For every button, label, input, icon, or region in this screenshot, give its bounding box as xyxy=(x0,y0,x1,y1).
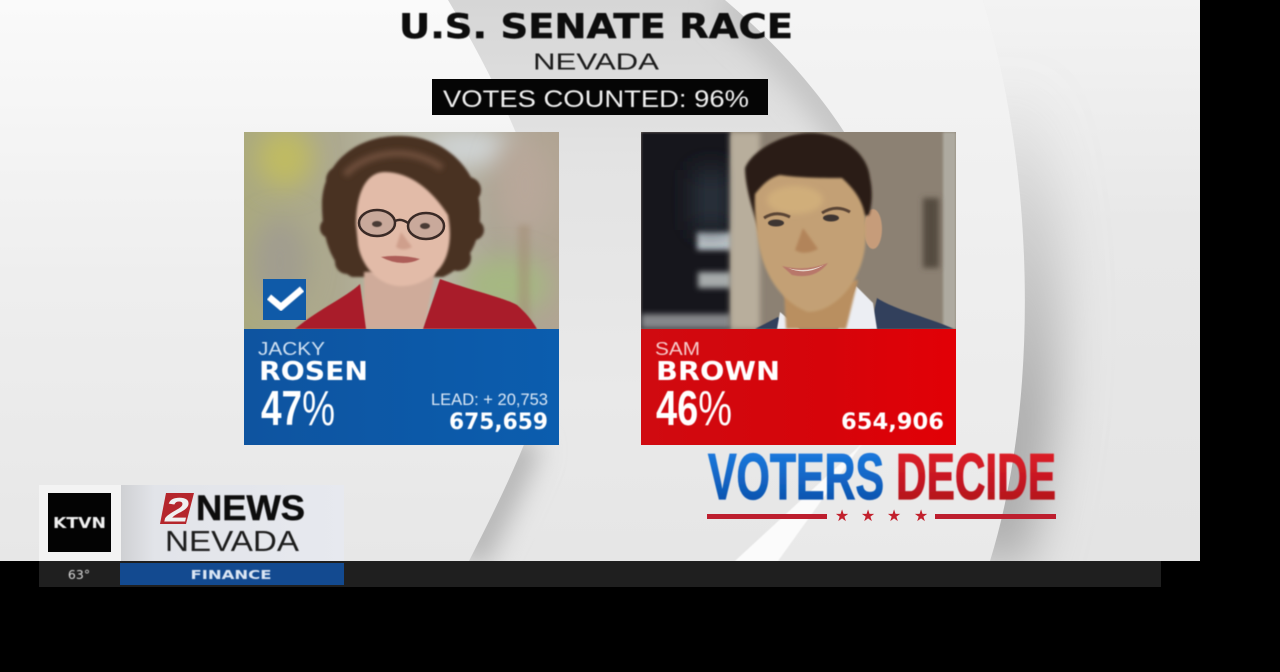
logo: 2 News Nevada: NEVADA xyxy=(165,526,300,558)
station bug: KTVN xyxy=(39,485,121,561)
hair xyxy=(320,136,484,277)
panel: Sam Brown xyxy=(641,132,956,445)
ticker bar xyxy=(39,561,1161,587)
background panel xyxy=(0,0,1200,561)
finance label: FINANCE xyxy=(190,567,272,582)
photo: Jacky Rosen xyxy=(244,128,559,330)
logo: Voters Decide: ★ xyxy=(914,508,928,525)
icon: checkmark xyxy=(263,279,306,320)
logo: Voters Decide: ★ xyxy=(887,508,901,525)
logo: 2 News Nevada: 2 xyxy=(164,492,189,530)
logo: Voters Decide xyxy=(707,440,1056,525)
name bar: Rosen: JACKY xyxy=(258,338,325,359)
title: U.S. SENATE RACE xyxy=(399,7,793,47)
logo: 2 News Nevada xyxy=(121,485,344,561)
neck xyxy=(784,280,858,329)
finance label xyxy=(120,563,344,585)
face xyxy=(356,172,450,286)
votes counted bar: VOTES COUNTED: 96% xyxy=(443,86,749,113)
ear xyxy=(864,209,882,249)
name bar: Rosen: LEAD: + 20,753 xyxy=(431,391,548,409)
glasses xyxy=(359,210,395,236)
jacket xyxy=(295,284,366,329)
name bar: Brown: SAM xyxy=(655,338,700,359)
logo: 2 News Nevada: NEWS xyxy=(196,489,305,528)
name bar: Brown xyxy=(641,329,956,445)
shirt xyxy=(777,286,877,329)
logo: Voters Decide: VOTERS xyxy=(708,440,884,513)
name bar: Rosen: 47% xyxy=(261,382,335,436)
logo: Voters Decide: DECIDE xyxy=(896,440,1056,513)
hair xyxy=(745,133,872,232)
name bar: Rosen: ROSEN xyxy=(259,357,368,387)
face xyxy=(755,175,866,312)
logo: Voters Decide: ★ xyxy=(861,508,875,525)
votes counted bar xyxy=(432,79,768,115)
neck xyxy=(364,268,436,329)
logo: Voters Decide: ★ xyxy=(835,508,849,525)
name bar: Rosen xyxy=(244,329,559,445)
station bug: KTVN: KTVN xyxy=(53,514,106,532)
panel: Jacky Rosen xyxy=(244,128,559,445)
name bar: Rosen: 675,659 xyxy=(449,410,548,435)
temperature: 63° xyxy=(68,567,90,582)
subtitle: Nevada: NEVADA xyxy=(533,48,660,74)
name bar: Brown: 654,906 xyxy=(841,410,944,435)
name bar: Brown: 46% xyxy=(656,382,732,436)
photo: Sam Brown xyxy=(641,132,956,329)
suit xyxy=(755,298,954,329)
name bar: Brown: BROWN xyxy=(656,357,780,387)
